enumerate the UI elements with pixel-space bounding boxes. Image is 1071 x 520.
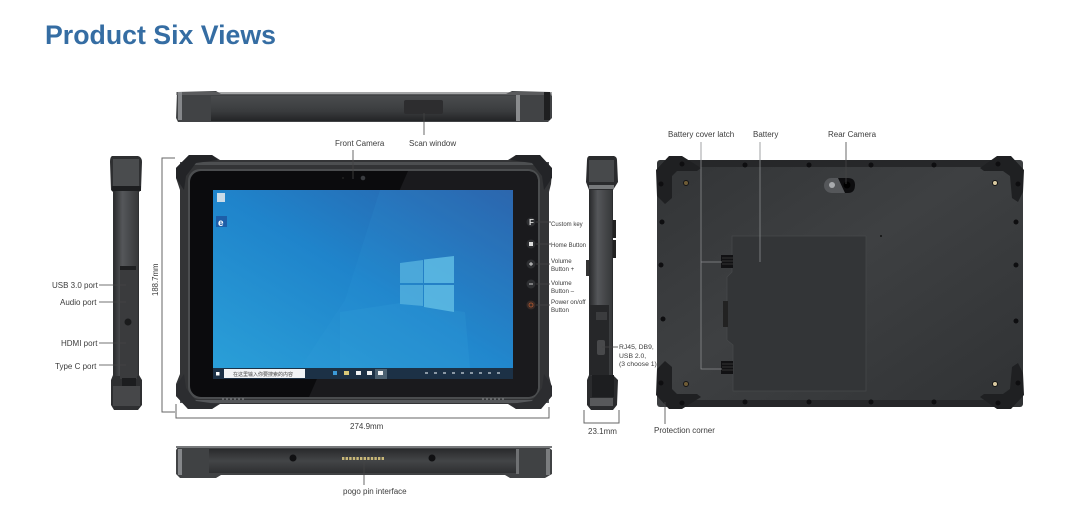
dimension: width: 274.9mm: [350, 422, 384, 431]
callout: RJ45: (3 choose 1): [619, 361, 657, 368]
callout: custom key: Custom key: [551, 222, 583, 228]
callout: scan window: [409, 113, 456, 148]
callout: rear camera: Rear Camera: [828, 130, 877, 139]
callout: volume down: Volume: [551, 280, 572, 287]
title: Product Six Views: [45, 20, 276, 50]
rear camera: [824, 178, 855, 193]
callout: volume up: Button +: [551, 266, 575, 273]
screen bezel: [190, 171, 538, 397]
callout: HDMI port: [61, 339, 126, 348]
battery latches: [721, 255, 733, 268]
battery cover: [727, 236, 866, 391]
wallpaper light rays: [300, 190, 513, 368]
callout: pogo pin: [343, 460, 407, 496]
bottom view of tablet: [176, 446, 552, 478]
dimension: width: [176, 404, 549, 431]
callout: pogo pin: pogo pin interface: [343, 487, 407, 496]
front view of tablet: [176, 155, 552, 409]
front view of tablet: e: [218, 218, 224, 229]
callout: scan window: Scan window: [409, 139, 456, 148]
callout: Type C port: Type C port: [55, 362, 97, 371]
callout: USB 3.0 port: [52, 281, 126, 290]
callout: protection corner: Protection corner: [654, 426, 715, 435]
callout: battery cover latch: [668, 130, 734, 369]
screw holes: [290, 454, 296, 462]
scan window: [404, 100, 443, 114]
callout: protection corner: [654, 402, 715, 435]
callout: rear camera: [828, 130, 877, 184]
dimension: height: [151, 158, 175, 412]
callout: volume up: [536, 258, 575, 273]
inner mount holes: [684, 180, 688, 186]
callout: battery cover latch: Battery cover latch: [668, 130, 734, 139]
callout: audio port: [60, 298, 126, 307]
callout: RJ45: RJ45, DB9,: [619, 344, 654, 351]
callout: HDMI port: HDMI port: [61, 339, 98, 348]
callout: RJ45: [602, 344, 657, 368]
callout: volume down: [536, 280, 575, 295]
rear view of tablet: [656, 156, 1024, 409]
callout: custom key: [536, 222, 583, 228]
dimension: thickness: [584, 410, 619, 436]
corner bumpers: [176, 155, 218, 190]
pogo pins: [342, 457, 385, 460]
camera: [361, 176, 365, 180]
protection corners: [656, 156, 701, 204]
side buttons: [526, 218, 536, 226]
callout: power button: [536, 299, 586, 314]
desktop icons: [217, 193, 225, 202]
desktop wallpaper: [213, 190, 513, 368]
front view of tablet: 在这里输入你要搜索的内容: [233, 371, 293, 378]
left side view of tablet: [110, 156, 142, 410]
taskbar: [213, 368, 513, 379]
callout: RJ45: USB 2.0,: [619, 353, 646, 360]
callout: battery: [753, 130, 778, 262]
callout: audio port: Audio port: [60, 298, 97, 307]
front view of tablet: F: [529, 218, 534, 227]
callout: home button: Home Button: [551, 243, 586, 249]
dimension: height: 188.7mm: [151, 263, 160, 296]
dimension: thickness: 23.1mm: [588, 427, 617, 436]
callout: volume down: Button –: [551, 288, 575, 295]
rear screws: [658, 162, 1020, 406]
callout: battery: Battery: [753, 130, 778, 139]
callout: Type C port: [55, 362, 126, 371]
callout: USB 3.0 port: USB 3.0 port: [52, 281, 99, 290]
right side view of tablet: [586, 156, 618, 410]
callout: volume up: Volume: [551, 258, 572, 265]
callout: front camera: [335, 139, 385, 177]
callout: power button: Power on/off: [551, 299, 586, 306]
callout: front camera: Front Camera: [335, 139, 385, 148]
windows logo: [400, 256, 454, 312]
speaker grilles: [222, 398, 245, 400]
top view of tablet: [176, 91, 552, 122]
callout: power button: Button: [551, 307, 569, 314]
